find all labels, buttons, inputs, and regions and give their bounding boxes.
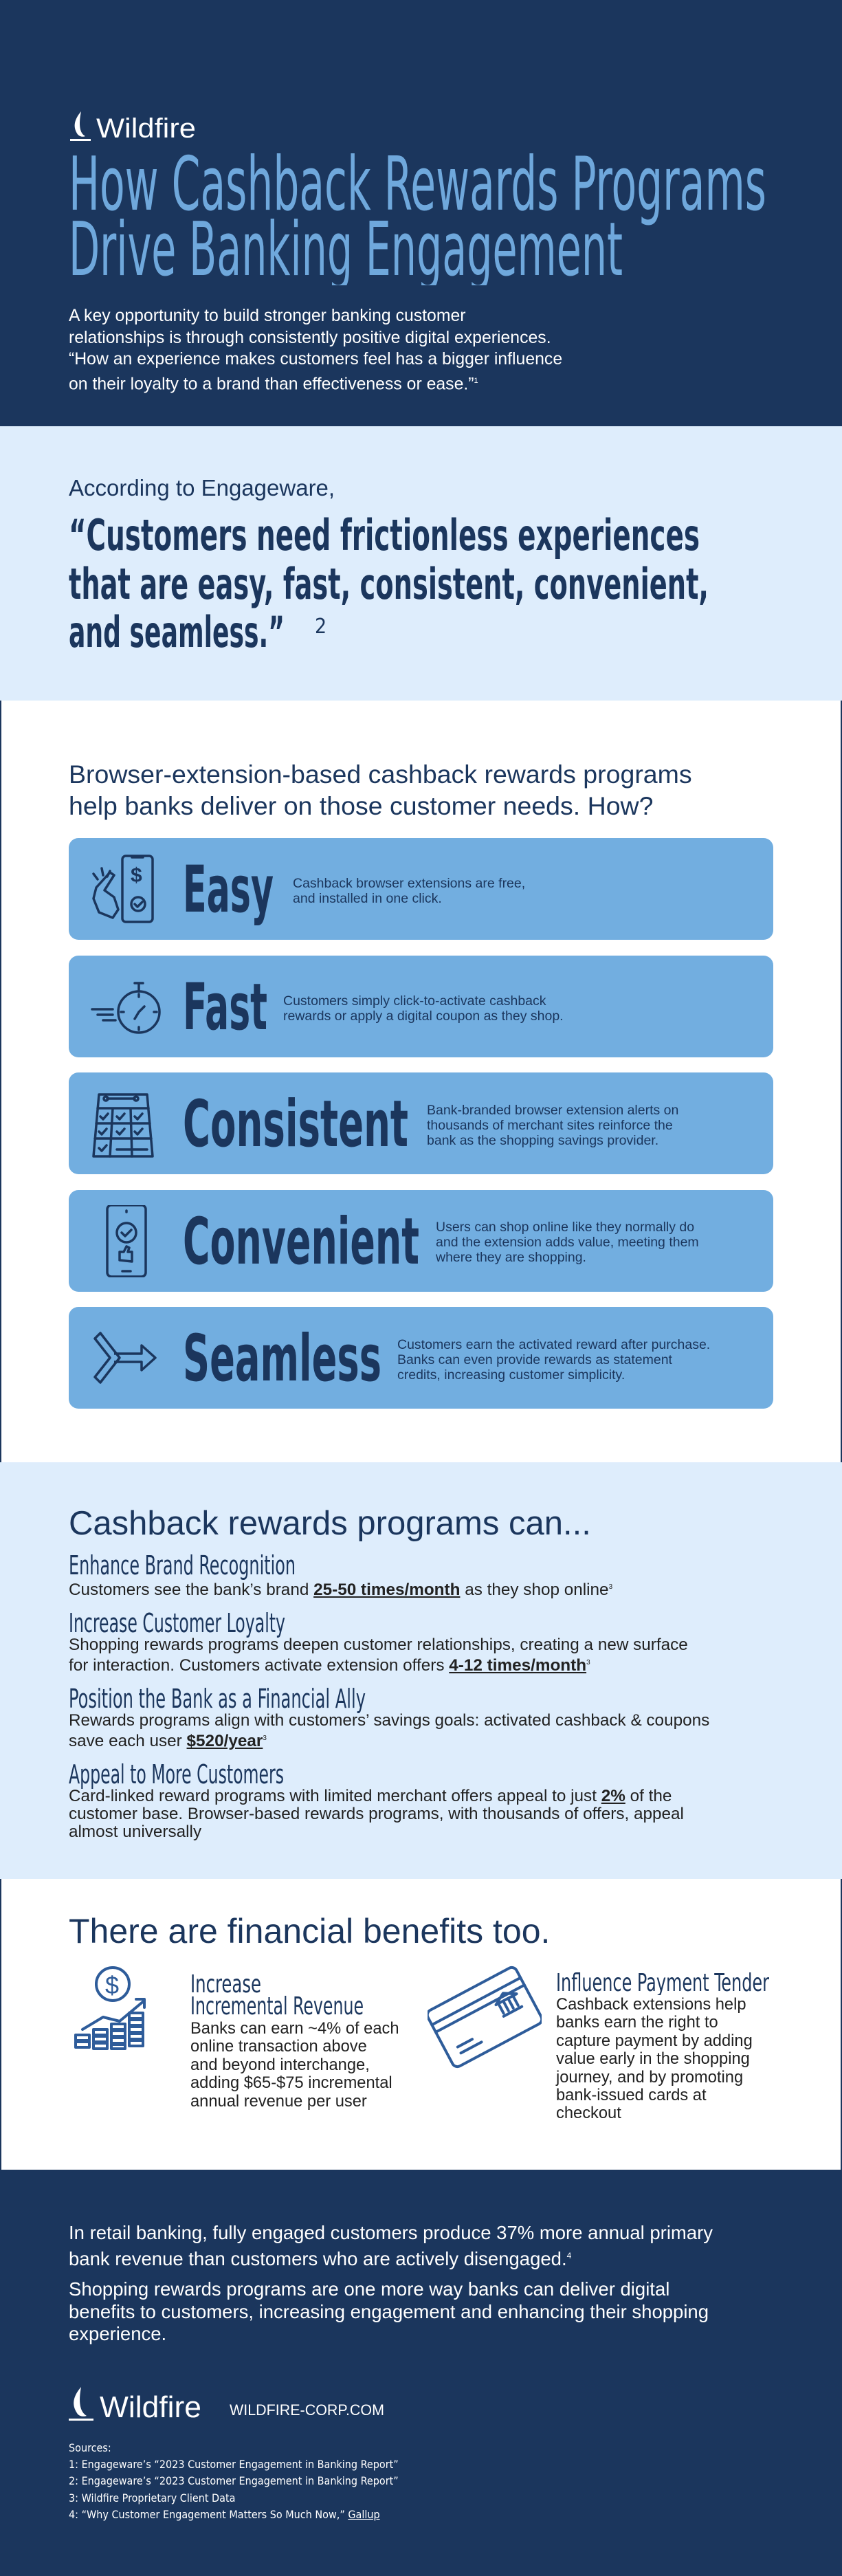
closing text — [69, 2222, 713, 2344]
heading: financial benefits: There are financial benefits too. — [69, 1912, 550, 1950]
text: loyalty — [69, 1636, 688, 1675]
intro text: “How an experience makes customers feel has a bigger influence — [69, 350, 562, 368]
card: Convenient — [69, 1190, 773, 1292]
sources: 3: Wildfire Proprietary Client Data — [69, 2491, 235, 2505]
sub-headings: Increase Customer Loyalty — [69, 1608, 285, 1638]
frame border — [0, 426, 842, 2170]
closing text: experience. — [69, 2323, 166, 2344]
benefit: payment tender: banks earn the right to — [556, 2014, 718, 2032]
benefit: incremental revenue: annual revenue per user — [190, 2093, 367, 2111]
sources: Sources: — [69, 2441, 111, 2454]
description: and installed in one click. — [293, 891, 442, 906]
text: financial ally — [69, 1711, 709, 1750]
text: financial ally: Rewards programs align with customers’ savings goals: activated cashback & coupons — [69, 1711, 709, 1730]
description: rewards or apply a digital coupon as they shop. — [283, 1009, 564, 1024]
card: Seamless — [69, 1307, 773, 1409]
benefit: incremental revenue: and beyond interchange, — [190, 2056, 370, 2074]
benefit: payment tender: capture payment by adding — [556, 2032, 753, 2050]
description — [427, 1103, 678, 1148]
quote: and seamless.” — [69, 607, 285, 657]
description: Users can shop online like they normally do — [436, 1220, 694, 1235]
intro text: on their loyalty to a brand than effectiveness or ease.”1 — [69, 375, 478, 393]
description: Cashback browser extensions are free, — [293, 876, 525, 891]
icon: bank card — [428, 1966, 542, 2068]
sub-headings: Position the Bank as a Financial Ally — [69, 1684, 366, 1714]
title — [69, 148, 766, 285]
panel: Engageware quote — [0, 426, 842, 701]
description — [397, 1337, 710, 1383]
closing text: In retail banking, fully engaged customers produce 37% more annual primary — [69, 2222, 713, 2243]
text: appeal: Card-linked reward programs with limited merchant offers appeal to just 2% of the — [69, 1787, 672, 1805]
icon: calendar with checks — [92, 1093, 154, 1158]
sources — [69, 2441, 399, 2521]
text: brand recognition: Customers see the bank’s brand 25-50 times/month as they shop online3 — [69, 1581, 612, 1599]
panel: cashback rewards programs can — [0, 1462, 842, 1879]
sources: 4: “Why Customer Engagement Matters So Much Now,” Gallup — [69, 2508, 380, 2521]
description — [293, 876, 525, 906]
text: appeal: almost universally — [69, 1823, 201, 1841]
benefit: payment tender: Cashback extensions help — [556, 1996, 746, 2014]
logo: Wildfire: Wildfire — [96, 113, 196, 143]
description: and the extension adds value, meeting them — [436, 1235, 699, 1250]
header panel — [0, 0, 842, 426]
closing text: benefits to customers, increasing engagement and enhancing their shopping — [69, 2301, 709, 2322]
heading: Cashback rewards programs can... — [69, 1505, 591, 1542]
icon: coins and growth — [74, 1966, 146, 2050]
description: bank as the shopping savings provider. — [427, 1133, 658, 1148]
footer logo and url — [69, 2387, 384, 2423]
sources: 2: Engageware’s “2023 Customer Engagement in Banking Report” — [69, 2474, 399, 2487]
icon: hand tapping phone — [92, 855, 154, 923]
intro text: A key opportunity to build stronger banking customer — [69, 307, 466, 325]
sub-headings — [69, 1550, 366, 1790]
icon: phone with check — [106, 1205, 147, 1277]
quote: 2 — [315, 615, 326, 639]
icon: merging arrow — [93, 1332, 157, 1384]
benefit: incremental revenue: Increase — [190, 1970, 261, 1999]
benefit: payment tender: journey, and by promoting — [556, 2069, 743, 2087]
text: financial ally: save each user $520/year3 — [69, 1732, 267, 1750]
description: credits, increasing customer simplicity. — [397, 1367, 625, 1383]
icon: coins and growth: $ — [105, 1971, 119, 1999]
section heading: browser extension: help banks deliver on those customer needs. How? — [69, 791, 653, 820]
section heading: browser extension — [69, 760, 692, 820]
text: loyalty: Shopping rewards programs deepen customer relationships, creating a new surface — [69, 1636, 688, 1654]
benefit: incremental revenue — [190, 1970, 399, 2111]
intro text — [69, 307, 562, 393]
description — [283, 993, 564, 1024]
card: Easy — [69, 838, 773, 940]
description: Customers simply click-to-activate cashback — [283, 993, 546, 1009]
quote — [69, 512, 709, 657]
icon: hand tapping phone: $ — [131, 864, 142, 887]
logo: Wildfire — [70, 111, 196, 143]
sub-headings: Enhance Brand Recognition — [69, 1550, 296, 1581]
benefit: payment tender: bank-issued cards at — [556, 2087, 707, 2104]
benefit: incremental revenue: Banks can earn ~4% of each — [190, 2020, 399, 2038]
description: thousands of merchant sites reinforce the — [427, 1118, 673, 1133]
benefit: payment tender: checkout — [556, 2104, 621, 2122]
benefit: incremental revenue: adding $65-$75 incremental — [190, 2074, 392, 2092]
description: where they are shopping. — [436, 1250, 586, 1265]
card: Fast — [69, 956, 773, 1057]
closing text: Shopping rewards programs are one more way banks can deliver digital — [69, 2278, 669, 2300]
description — [436, 1220, 699, 1265]
sub-headings: Appeal to More Customers — [69, 1759, 284, 1790]
closing text: bank revenue than customers who are actively disengaged.4 — [69, 2248, 571, 2269]
section heading: browser extension: Browser-extension-based cashback rewards programs — [69, 760, 692, 789]
footer panel — [0, 2170, 842, 2576]
benefit: payment tender — [555, 1969, 770, 2122]
sources: 1: Engageware’s “2023 Customer Engagement in Banking Report” — [69, 2458, 399, 2471]
intro text: relationships is through consistently positive digital experiences. — [69, 329, 551, 347]
benefit: payment tender: value early in the shopping — [556, 2050, 750, 2068]
intro line: According to Engageware, — [69, 475, 335, 500]
card: Consistent — [69, 1072, 773, 1174]
benefit: incremental revenue: online transaction above — [190, 2038, 367, 2056]
text: appeal: customer base. Browser-based rewards programs, with thousands of offers, appeal — [69, 1805, 684, 1823]
text: appeal — [69, 1787, 684, 1841]
description: Customers earn the activated reward after purchase. — [397, 1337, 710, 1352]
icon: stopwatch — [91, 982, 161, 1034]
description: Bank-branded browser extension alerts on — [427, 1103, 678, 1118]
text: loyalty: for interaction. Customers activate extension offers 4-12 times/month3 — [69, 1656, 590, 1675]
description: Banks can even provide rewards as statement — [397, 1352, 672, 1367]
footer logo and url: WILDFIRE-CORP.COM — [230, 2401, 384, 2419]
